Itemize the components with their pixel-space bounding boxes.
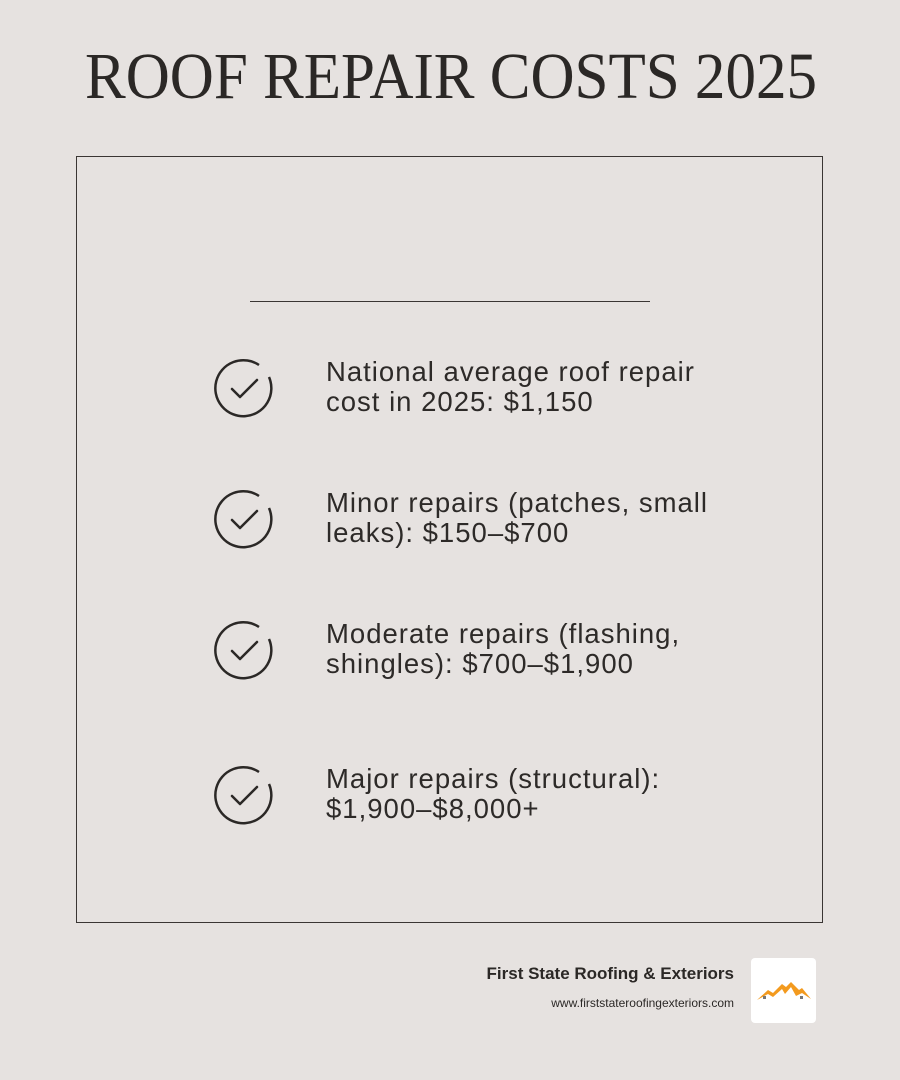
logo (751, 958, 816, 1023)
item: moderate repairs: Moderate repairs (flashing, (326, 618, 680, 649)
footer: website: www.firststateroofingexteriors.com (551, 996, 734, 1010)
footer: company name: First State Roofing & Exteriors (487, 964, 734, 983)
item: minor repairs: leaks): $150–$700 (326, 517, 569, 548)
item: major repairs: $1,900–$8,000+ (326, 793, 540, 824)
panel: cost list (76, 156, 823, 923)
item: major repairs (214, 763, 660, 824)
item: national average: cost in 2025: $1,150 (326, 386, 594, 417)
icon: check circle (214, 490, 273, 548)
item: major repairs: Major repairs (structural): (326, 763, 660, 794)
item: national average: National average roof repair (326, 356, 695, 387)
item: minor repairs: Minor repairs (patches, small (326, 487, 708, 518)
icon: check circle (214, 621, 273, 680)
item: national average (214, 356, 695, 418)
divider line (250, 301, 650, 302)
icon: check circle (214, 359, 273, 418)
item: moderate repairs: shingles): $700–$1,900 (326, 648, 634, 679)
item: minor repairs (214, 487, 708, 548)
item: moderate repairs (214, 618, 680, 680)
icon: check circle (214, 766, 273, 824)
